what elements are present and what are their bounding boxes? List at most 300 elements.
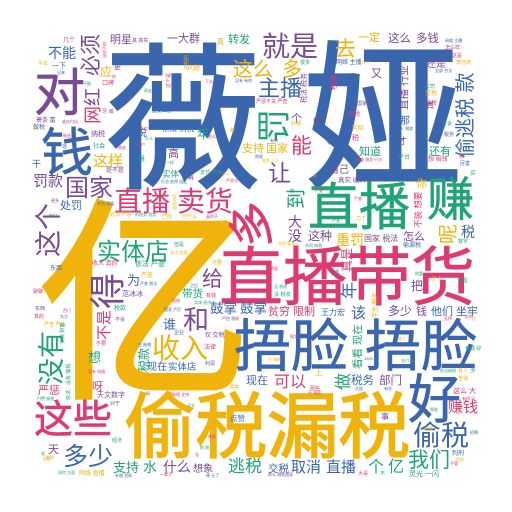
medium words: 多钱 bbox=[416, 31, 439, 45]
medium words: 这么 大 bbox=[453, 386, 476, 395]
medium words: 范冰冰 bbox=[122, 289, 143, 298]
medium words: 没 bbox=[288, 228, 302, 244]
word: 能: 能 bbox=[291, 135, 312, 158]
medium words: 实体 bbox=[162, 169, 180, 179]
tiny filler words: 怎么样 bbox=[445, 44, 460, 51]
tiny filler words: 力了 bbox=[356, 215, 366, 222]
medium words: 钱 bbox=[416, 304, 427, 318]
tiny filler words: 不过 bbox=[140, 125, 148, 131]
word: 我们: 我们 bbox=[408, 449, 450, 472]
tiny filler words: 补税 罚款 bbox=[115, 472, 132, 478]
tiny filler words: 有钱 bbox=[206, 292, 216, 299]
tiny filler words: 税收 bbox=[328, 74, 338, 90]
tiny filler words: 没有 网络 bbox=[88, 368, 105, 374]
tiny filler words: 付费 偷税 bbox=[37, 395, 54, 401]
word: 直播带货: 直播带货 bbox=[219, 242, 475, 314]
medium words: 支持 bbox=[113, 460, 139, 475]
tiny filler words: 重要出您 bbox=[152, 107, 172, 114]
word: 这些: 这些 bbox=[34, 399, 112, 442]
medium words: 高 bbox=[168, 146, 179, 160]
tiny filler words: 判刑 bbox=[452, 449, 464, 457]
tiny filler words: 仅 交税 bbox=[205, 331, 225, 339]
tiny filler words: 没 税收 bbox=[274, 291, 290, 298]
medium words: 谁 bbox=[163, 317, 176, 332]
word: 娅: 娅 bbox=[303, 30, 463, 209]
medium words: 纳税 bbox=[91, 129, 105, 138]
tiny filler words: 张 bbox=[41, 450, 45, 456]
medium words: 税务 bbox=[351, 373, 374, 387]
word: 实体店: 实体店 bbox=[97, 239, 169, 266]
tiny filler words: 其 真实 bbox=[132, 37, 148, 44]
tiny filler words: 财富 bbox=[415, 270, 423, 276]
medium words: 重罚 bbox=[336, 232, 364, 248]
medium words: 可以 bbox=[274, 374, 306, 391]
tiny filler words: 想 捐钱 bbox=[428, 155, 448, 163]
tiny filler words: 交 bbox=[472, 315, 476, 321]
tiny filler words: 他们 bbox=[49, 212, 57, 218]
tiny filler words: 平台 国家 bbox=[97, 200, 114, 206]
tiny filler words: 交税 bbox=[425, 89, 437, 97]
tiny filler words: 严查 bbox=[141, 271, 153, 279]
tiny filler words: 这些的 bbox=[183, 55, 190, 70]
word: 亿: 亿 bbox=[36, 186, 254, 429]
tiny filler words: 严查 严处 bbox=[44, 321, 65, 328]
tiny filler words: 小心 bbox=[222, 170, 230, 176]
tiny filler words: 税法 税务 bbox=[299, 73, 308, 103]
tiny filler words: 万人 bbox=[432, 276, 442, 282]
medium words: 干 bbox=[32, 159, 41, 169]
medium words: 那 bbox=[400, 115, 410, 127]
tiny filler words: 今年 bbox=[38, 60, 48, 67]
tiny filler words: 经济 bbox=[112, 437, 122, 444]
tiny filler words: 降低 bbox=[208, 433, 216, 439]
tiny filler words: 共同 富裕 bbox=[278, 240, 295, 246]
medium words: 税款 bbox=[137, 348, 151, 372]
word: 收入: 收入 bbox=[152, 333, 208, 364]
medium words: 明星 bbox=[110, 33, 132, 46]
tiny filler words: 1500 bbox=[364, 356, 374, 361]
tiny filler words: 不交 bbox=[187, 402, 195, 408]
medium words: 应 bbox=[100, 64, 112, 79]
medium words: 国家 税法 bbox=[364, 233, 398, 243]
tiny filler words: 全部 合法 bbox=[435, 67, 452, 73]
tiny filler words: 不能 bbox=[83, 80, 91, 86]
tiny filler words: 税务 八万 bbox=[262, 157, 279, 163]
tiny filler words: 有钱 没 bbox=[462, 395, 475, 401]
tiny filler words: 严惩不贷 严查 bbox=[256, 98, 287, 105]
medium words: 年 bbox=[197, 127, 209, 141]
word: 赚: 赚 bbox=[427, 173, 474, 226]
word: 多: 多 bbox=[282, 58, 302, 81]
medium words: 王力宏 bbox=[321, 307, 345, 317]
tiny filler words: 如何 方面 bbox=[58, 469, 75, 475]
medium words: 他们 bbox=[431, 304, 453, 318]
tiny filler words: 偷漏税 bbox=[403, 241, 421, 249]
tiny filler words: 实际 bbox=[352, 124, 364, 132]
medium words: 是不是 bbox=[106, 167, 124, 174]
medium words: 做 bbox=[334, 373, 353, 390]
tiny filler words: 有些 bbox=[384, 385, 392, 391]
tiny filler words: 八块个 bbox=[358, 59, 370, 65]
medium words: 个 bbox=[291, 112, 302, 125]
tiny filler words: 依法 严查 bbox=[135, 259, 165, 268]
word: 去: 去 bbox=[335, 38, 356, 61]
tiny filler words: 有人 bbox=[458, 367, 468, 374]
tiny filler words: 没 税收 bbox=[274, 283, 287, 289]
tiny filler words: 税 bbox=[230, 127, 235, 134]
tiny filler words: 牙 城 bbox=[102, 108, 113, 115]
tiny filler words: 为什么 bbox=[182, 213, 197, 220]
tiny filler words: 万 bbox=[178, 451, 183, 457]
tiny filler words: 偷税 bbox=[348, 110, 360, 118]
tiny filler words: 大众 bbox=[145, 135, 153, 141]
medium words: 不装 想要 bbox=[413, 191, 423, 228]
tiny filler words: 有钱 bbox=[327, 139, 335, 145]
tiny filler words: 利润 bbox=[205, 360, 215, 367]
tiny filler words: 支持 bbox=[444, 315, 452, 321]
medium words: 鼓掌 bbox=[210, 301, 237, 316]
medium words: 更 bbox=[114, 63, 121, 71]
tiny filler words: 下去 bbox=[205, 78, 213, 84]
tiny filler words: 明星 bbox=[270, 265, 278, 271]
tiny filler words: 税务 bbox=[444, 131, 454, 138]
tiny filler words: 收入 bbox=[398, 335, 406, 341]
medium words: 这么 bbox=[388, 31, 411, 45]
tiny filler words: 税收 bbox=[430, 406, 438, 412]
medium words: 实体店 bbox=[168, 361, 197, 373]
tiny filler words: 漂亮 bbox=[229, 384, 239, 391]
tiny filler words: 张 bbox=[195, 451, 199, 457]
medium words: 说 bbox=[137, 126, 147, 139]
medium words: 取消 bbox=[291, 459, 321, 476]
tiny filler words: 真 bbox=[426, 100, 434, 110]
tiny filler words: 税 bbox=[290, 187, 294, 193]
word: 卖货: 卖货 bbox=[177, 186, 233, 217]
tiny filler words: 普通 bbox=[458, 375, 468, 382]
tiny filler words: 萧条 富 bbox=[36, 116, 56, 124]
tiny filler words: 一样 bbox=[166, 159, 174, 165]
medium words: 自己 bbox=[329, 163, 349, 176]
tiny filler words: 实际 财富 bbox=[59, 323, 66, 344]
tiny filler words: 网络 直播 bbox=[79, 469, 105, 477]
tiny filler words: 网 bbox=[146, 391, 150, 396]
tiny filler words: 有钱 好 bbox=[465, 345, 481, 352]
tiny filler words: 放弃 bbox=[118, 144, 126, 150]
tiny filler words: 不 税收 bbox=[308, 389, 321, 395]
medium words: 年 bbox=[340, 282, 359, 299]
tiny filler words: 税 bbox=[352, 133, 359, 142]
tiny filler words: 这样子的 bbox=[101, 42, 107, 58]
medium words: 处罚 bbox=[60, 199, 82, 212]
tiny filler words: 依法纳税 bbox=[440, 367, 456, 373]
tiny filler words: 支持人 bbox=[222, 95, 234, 101]
word: 偷逃税 款 rotated: 偷逃税 款 bbox=[454, 72, 477, 158]
word: 多少: 多少 bbox=[63, 443, 113, 471]
medium words: 一大群 bbox=[167, 31, 200, 45]
tiny filler words: 支付 没 bbox=[401, 357, 414, 363]
tiny filler words: 已经 bbox=[162, 213, 172, 220]
medium words: 直播 bbox=[326, 459, 356, 476]
word: 对: 对 bbox=[34, 65, 85, 122]
tiny filler words: 企业 bbox=[174, 329, 184, 336]
tiny filler words: 税款 bbox=[114, 304, 126, 312]
medium words: 多少 bbox=[388, 304, 412, 318]
tiny filler words: 主 偷税 bbox=[138, 341, 151, 347]
tiny filler words: 这是 bbox=[452, 52, 462, 59]
tiny filler words: 网络 税务 行为 bbox=[356, 156, 382, 162]
tiny filler words: 那么 bbox=[208, 133, 216, 139]
tiny filler words: 多 bbox=[470, 366, 476, 374]
word: 不是 rotated: 不是 bbox=[96, 310, 113, 340]
tiny filler words: 没有 有的 bbox=[235, 77, 252, 83]
tiny filler words: 公司 bbox=[425, 84, 435, 90]
tiny filler words: 支付 严格 bbox=[200, 169, 221, 176]
tiny filler words: 打击 依然 因此 bbox=[161, 178, 187, 184]
tiny filler words: 网友 bbox=[144, 87, 152, 93]
tiny filler words: 的 税 bbox=[200, 444, 209, 450]
medium words: 平台 bbox=[398, 153, 410, 161]
medium words: 呀 bbox=[92, 380, 103, 393]
tiny filler words: 依法 bbox=[65, 390, 72, 400]
tiny filler words: 东方 bbox=[60, 313, 68, 319]
word: 就是: 就是 bbox=[262, 31, 318, 62]
word: 网 rotated: 网 bbox=[83, 106, 103, 124]
medium words: 想象 bbox=[193, 462, 213, 475]
tiny filler words: 买 bbox=[470, 169, 476, 177]
medium words: 还有 bbox=[429, 144, 451, 158]
tiny filler words: 好 bbox=[313, 172, 317, 178]
tiny filler words: 社会 bbox=[442, 120, 452, 127]
medium words: 鼓掌 bbox=[240, 301, 267, 316]
medium words: 贫穷 bbox=[268, 304, 290, 318]
medium words: 才 bbox=[398, 135, 407, 146]
tiny filler words: 收入 税收 bbox=[396, 125, 413, 131]
tiny filler words: 偷逃 bbox=[63, 132, 71, 138]
medium words: 税 bbox=[461, 224, 475, 240]
tiny filler words: 网络 主播 bbox=[336, 58, 362, 66]
tiny filler words: 严查 bbox=[332, 217, 340, 223]
tiny filler words: 明星 bbox=[458, 278, 468, 284]
word: 偷税漏税: 偷税漏税 bbox=[124, 388, 410, 468]
tiny filler words: 用户 bbox=[137, 141, 145, 147]
tiny filler words: 那么 税收国家 bbox=[268, 471, 293, 477]
tiny filler words: 看 bbox=[459, 153, 464, 160]
medium words: 现在 bbox=[147, 361, 167, 373]
medium words: 国家 bbox=[266, 141, 288, 155]
tiny filler words: 聊聊 bbox=[33, 288, 43, 295]
tiny filler words: 还要 bbox=[212, 259, 222, 266]
tiny filler words: 东西 bbox=[50, 264, 62, 272]
tiny filler words: 网络 主播 bbox=[445, 37, 462, 43]
medium words: 坐牢 bbox=[456, 304, 478, 318]
word: 必须 rotated: 必须 bbox=[80, 34, 103, 76]
tiny filler words: 做税 bbox=[33, 123, 45, 131]
tiny filler words: 实体 经济 bbox=[194, 299, 211, 305]
medium words: 一定 bbox=[358, 30, 380, 44]
medium words: 该 bbox=[351, 305, 366, 322]
tiny filler words: 降 无了 bbox=[206, 472, 219, 478]
word: 主播: 主播 bbox=[258, 76, 302, 101]
tiny filler words: 上 bbox=[315, 368, 323, 377]
medium words: 赚钱 bbox=[448, 399, 478, 416]
medium words: 看看 现在 bbox=[351, 324, 364, 369]
medium words: 逃税 bbox=[228, 457, 262, 476]
tiny filler words: 的税务 税务 bbox=[135, 211, 156, 217]
medium words: 把 bbox=[411, 279, 423, 293]
tiny filler words: 税务 bbox=[313, 117, 323, 124]
word: 这么: 这么 bbox=[233, 58, 273, 81]
tiny filler words: 真的不 bbox=[206, 213, 218, 219]
medium words: 亿 bbox=[388, 458, 404, 476]
tiny filler words: 国家 严厉 bbox=[164, 306, 181, 312]
medium words: 不能 bbox=[48, 45, 76, 61]
medium words: 灵光 一闪 bbox=[409, 469, 439, 478]
tiny filler words: 网络 bbox=[172, 297, 180, 303]
tiny filler words: 出来 bbox=[57, 69, 65, 75]
medium words: 转发 bbox=[228, 32, 250, 46]
medium words: 什么 bbox=[163, 459, 191, 475]
medium words bbox=[32, 30, 478, 478]
tiny filler words: 逃 bbox=[62, 143, 67, 150]
tiny filler words: 问题 bbox=[188, 64, 200, 72]
word: 和: 和 bbox=[183, 305, 209, 335]
medium words: 真是 bbox=[340, 248, 354, 272]
medium words: 个 bbox=[368, 458, 384, 476]
word: 捂脸 right: 捂脸 bbox=[365, 315, 477, 378]
medium words: 部门 bbox=[379, 373, 402, 387]
word: 好: 好 bbox=[408, 371, 461, 430]
tiny filler words: 招聘 bbox=[470, 429, 478, 435]
tiny filler words: 有的 bbox=[270, 137, 278, 143]
medium words: 还是 bbox=[426, 58, 446, 70]
word: 直播 green: 直播 bbox=[308, 179, 410, 236]
tiny filler words: 对于 bbox=[110, 400, 120, 407]
word: 得 rotated: 得 bbox=[87, 273, 128, 309]
word: 捂脸 left: 捂脸 bbox=[234, 315, 348, 379]
medium words: 交税 bbox=[268, 462, 289, 475]
tiny filler words: 偷税 支持 bbox=[172, 391, 189, 397]
medium words: 这样 bbox=[93, 153, 123, 170]
tiny filler words: 学生 税务 bbox=[371, 292, 379, 318]
medium words: 事 bbox=[381, 411, 389, 421]
medium words: 知道 bbox=[359, 144, 381, 158]
tiny filler words: 发展 bbox=[424, 425, 432, 431]
word: 没有 rotated: 没有 bbox=[37, 331, 67, 385]
medium words: 你 bbox=[416, 177, 427, 190]
tiny filler words: 不管 bbox=[450, 460, 458, 466]
tiny filler words: 李佳琦 bbox=[456, 59, 471, 66]
tiny filler words: 偷税 bbox=[425, 99, 437, 107]
tiny filler words: 一万 万人 真的 bbox=[372, 175, 398, 181]
tiny filler words: 必须 严惩 bbox=[110, 211, 131, 218]
medium words: 大 bbox=[288, 214, 302, 230]
tiny filler words: 收入 真的 bbox=[92, 259, 118, 267]
word: 多 rotated: 多 bbox=[226, 201, 278, 247]
medium words: 真实 收入 bbox=[338, 175, 366, 184]
medium words: 想 bbox=[88, 350, 101, 365]
tiny filler words: 的 bbox=[112, 73, 116, 79]
word: 这个 rotated: 这个 bbox=[34, 203, 64, 257]
medium words: 这种 bbox=[308, 228, 332, 243]
tiny filler words: 很多 bbox=[300, 59, 310, 66]
medium words: 直播 行业 bbox=[397, 65, 410, 110]
medium words: 怎么 bbox=[403, 229, 425, 243]
medium words: 点赞 bbox=[230, 413, 245, 423]
tiny filler words: 厉害 bbox=[460, 160, 470, 167]
tiny filler words: 不会 bbox=[115, 316, 125, 323]
tiny filler words: 数字 bbox=[458, 238, 468, 245]
medium words: 一下 bbox=[52, 62, 66, 70]
tiny filler words: 口碑 bbox=[102, 79, 114, 87]
tiny filler words bbox=[33, 37, 481, 478]
tiny filler words: 看到 bbox=[46, 454, 54, 460]
word: 呢 rotated: 呢 bbox=[438, 224, 460, 244]
medium words: 限制 bbox=[293, 305, 315, 318]
tiny filler words: 税收 bbox=[255, 153, 263, 159]
word: 给: 给 bbox=[202, 268, 223, 291]
tiny filler words: 大胆 bbox=[355, 385, 363, 391]
medium words: 支持 bbox=[242, 141, 264, 155]
word: 钱: 钱 bbox=[41, 125, 93, 183]
tiny filler words: 主 税收 bbox=[268, 356, 281, 362]
tiny filler words: 几个 bbox=[63, 37, 75, 44]
tiny filler words: 但是 bbox=[174, 241, 184, 248]
medium words: 到 bbox=[285, 189, 308, 209]
medium words: 罚款 bbox=[33, 173, 63, 190]
medium words: 很 bbox=[138, 154, 145, 163]
medium words: 社会 bbox=[93, 142, 105, 150]
medium words: 天文数字 bbox=[97, 390, 125, 399]
medium words: 再 bbox=[188, 175, 194, 182]
tiny filler words: 非法 违规 bbox=[170, 249, 187, 255]
medium words: 现在 bbox=[246, 374, 268, 387]
tiny filler words: 严控 税收 bbox=[222, 315, 239, 321]
medium words: 水 bbox=[143, 459, 157, 475]
medium words: 带货 bbox=[182, 287, 203, 300]
tiny filler words: 很 税 bbox=[330, 268, 339, 274]
medium words: 为 bbox=[127, 273, 140, 288]
tiny filler words: 严查 bbox=[354, 195, 362, 201]
word: 让: 让 bbox=[268, 160, 291, 186]
tiny filler words: 不要 bbox=[96, 341, 106, 347]
tiny filler words: 这样的话 bbox=[171, 194, 177, 210]
tiny filler words: 现在 bbox=[43, 455, 51, 461]
tiny filler words: 严肃法 bbox=[226, 177, 238, 183]
word: 红 rotated: 红 bbox=[83, 88, 103, 106]
tiny filler words: 大哥 bbox=[358, 470, 368, 477]
tiny filler words: 西门 bbox=[63, 307, 71, 313]
tiny filler words: 国家 偷 bbox=[357, 100, 373, 107]
tiny filler words: 没有 偷税 bbox=[65, 364, 72, 385]
word: 罚 rotated: 罚 bbox=[256, 109, 294, 143]
word: 直播 pink: 直播 bbox=[114, 186, 170, 217]
tiny filler words: 这个是 bbox=[165, 73, 172, 88]
tiny filler words: 不 bbox=[380, 471, 385, 477]
tiny filler words: 谁应付出 bbox=[62, 118, 78, 124]
word: 国家: 国家 bbox=[65, 175, 113, 202]
tiny filler words: 税务 bbox=[290, 333, 298, 339]
tiny filler words: 好的 bbox=[465, 313, 473, 319]
word: 薇: 薇 bbox=[104, 34, 262, 210]
tiny filler words: 严查 税法 bbox=[140, 280, 157, 286]
tiny filler words: 共同 纳税 bbox=[305, 242, 322, 248]
tiny filler words: 东西 bbox=[35, 305, 45, 312]
tiny filler words: 好 bbox=[33, 125, 38, 132]
tiny filler words: 判刑 bbox=[456, 456, 464, 462]
word: 偷税: 偷税 bbox=[413, 420, 469, 451]
tiny filler words: 真 bbox=[217, 37, 224, 46]
tiny filler words: 之后 bbox=[190, 282, 198, 288]
